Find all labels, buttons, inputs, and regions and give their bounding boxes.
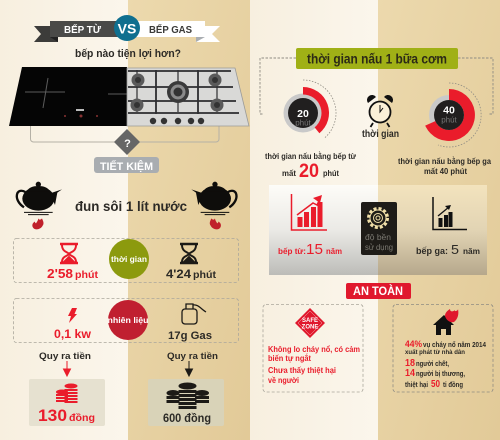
donut: 40 minutes: phút [441, 116, 458, 124]
value: gas time: phút [193, 269, 216, 281]
value: induction time [47, 266, 99, 281]
text: induction cooking time: 20 [299, 161, 319, 182]
title: cooking time: thời gian nấu 1 bữa cơm [307, 50, 447, 66]
induction cooktop [9, 67, 127, 126]
donut: 20 minutes: 20 [297, 108, 309, 120]
icon: gas tank [182, 304, 206, 324]
panel: durability [269, 185, 487, 275]
text: induction cooking time: thời gian nấu bằng bếp từ [265, 152, 356, 161]
text: fire statistics: xuất phát từ nhà dân [405, 348, 465, 356]
donut: 20 minutes [284, 80, 336, 138]
badge: durability: độ bền [365, 233, 391, 242]
background: left half panels [0, 0, 250, 440]
icon: lightning bolt [68, 308, 77, 323]
icon: right teapot with flame [191, 182, 236, 229]
dashed connector: cooking time [260, 58, 493, 114]
value: gas time: 4'24 [166, 269, 192, 281]
left conversion to money: Quy ra tiền [39, 351, 91, 362]
value: 17g gas: 17g Gas [168, 330, 212, 342]
text: gas cooking time [398, 157, 492, 176]
icon: alarm clock [367, 95, 393, 127]
value: gas lifetime: 5 [451, 243, 459, 257]
badge: durability: sử dụng [365, 243, 393, 252]
icon: burning house [433, 309, 458, 335]
text: induction cooking time: phút [323, 169, 339, 178]
ribbon: bếp từ: BẾP TỪ [64, 23, 101, 36]
icon: left teapot with flame [17, 182, 62, 229]
icon: safe zone diamond: ZONE [302, 324, 318, 330]
text: fire statistics [405, 339, 486, 390]
text: fire statistics: 18 [405, 358, 415, 369]
icon: black hourglass [180, 244, 198, 263]
badge: nhiên liệu [108, 300, 148, 340]
badge: nhiên liệu: nhiên liệu [108, 315, 148, 325]
donut: 40 minutes: 40 [443, 104, 455, 116]
icon: safe zone diamond [295, 308, 325, 338]
VS badge: VS [118, 20, 136, 36]
badge: durability [361, 202, 397, 255]
ribbon: bếp gas: BẾP GAS [149, 23, 192, 36]
label: an toàn: AN TOÀN [353, 283, 403, 298]
background: right half panels [250, 0, 500, 440]
text: induction cooking time [265, 152, 356, 182]
frame under cooktops [30, 126, 219, 142]
value: induction lifetime [278, 242, 342, 258]
ribbon: bếp từ [34, 21, 125, 42]
card: 130 đồng [29, 379, 105, 426]
text: safety notes: biến tự ngắt [268, 352, 311, 363]
panel: induction safety [263, 304, 363, 392]
value: induction lifetime: năm [326, 247, 342, 256]
card: 600 đồng: 600 đồng [163, 413, 211, 425]
label: tiết kiệm [94, 157, 159, 173]
header banner: bếp từ vs bếp gas [34, 15, 220, 42]
value: 0,1 kw: 0,1 kw [54, 327, 92, 341]
right conversion to money: Quy ra tiền [167, 351, 218, 362]
text: gas cooking time: mất 40 phút [424, 167, 467, 176]
value: gas lifetime: bếp ga: [416, 246, 448, 256]
value: induction time: 2'58 [47, 266, 73, 281]
text: safety notes: Không lo cháy nổ, có cảm [268, 344, 360, 354]
badge: thời gian: thời gian [111, 254, 147, 264]
gas cooktop [127, 68, 249, 126]
icon: red hourglass [60, 244, 78, 263]
text: fire statistics: vụ cháy nổ năm 2014 [423, 341, 486, 349]
question heading: bếp nào tiện lợi hơn? [75, 48, 181, 60]
text: fire statistics: 50 [431, 379, 440, 390]
value: induction lifetime: 15 [306, 242, 323, 258]
text: fire statistics: 14 [405, 368, 415, 379]
panel: gas safety [393, 304, 493, 392]
chart icon: gas growth [433, 197, 467, 230]
heading: boil one litre: đun sôi 1 lít nước [75, 198, 187, 214]
text: safety notes: về người [268, 375, 299, 385]
left conversion to money [29, 351, 105, 426]
text: safety notes: Chưa thấy thiệt hại [268, 365, 336, 375]
panel: fuel comparison [14, 298, 238, 342]
label: tiết kiệm: TIẾT KIỆM [100, 160, 153, 173]
value: gas lifetime [416, 243, 480, 257]
text: induction cooking time: mất [282, 169, 296, 178]
title: cooking time [296, 48, 458, 69]
icon: gear [368, 208, 388, 228]
cooktops image [9, 67, 249, 126]
card: 130 đồng: 130 [38, 406, 67, 425]
label: thời gian: thời gian [362, 129, 399, 140]
panel: time comparison [14, 238, 238, 282]
text: fire statistics: thiệt hại [405, 382, 428, 389]
value: induction lifetime: bếp từ: [278, 246, 306, 256]
arrow: black down [186, 361, 192, 376]
arrow: red down [64, 361, 70, 376]
value: gas lifetime: năm [463, 246, 480, 256]
right conversion to money [148, 351, 224, 426]
icon: question diamond [114, 129, 140, 155]
donut: 20 minutes: phút [295, 118, 312, 128]
value: gas time [166, 269, 216, 281]
value: induction time: phút [75, 270, 99, 281]
text: fire statistics: người bị thương, [416, 371, 465, 378]
ribbon: bếp gas [130, 21, 220, 42]
text: gas cooking time: thời gian nấu bằng bếp ga [398, 157, 492, 166]
card: 130 đồng: đồng [69, 412, 95, 424]
chart icon: induction growth [292, 194, 327, 230]
badge: thời gian [109, 239, 149, 279]
VS badge [114, 15, 140, 41]
donut: 40 minutes [425, 83, 481, 147]
text: fire statistics: 44% [405, 339, 422, 350]
text: fire statistics: tỉ đồng [443, 380, 463, 389]
icon: question diamond: ? [124, 138, 131, 150]
icon: safe zone diamond: SAFE [302, 318, 318, 324]
text: safety notes [268, 344, 360, 385]
text: fire statistics: người chết, [416, 360, 449, 368]
